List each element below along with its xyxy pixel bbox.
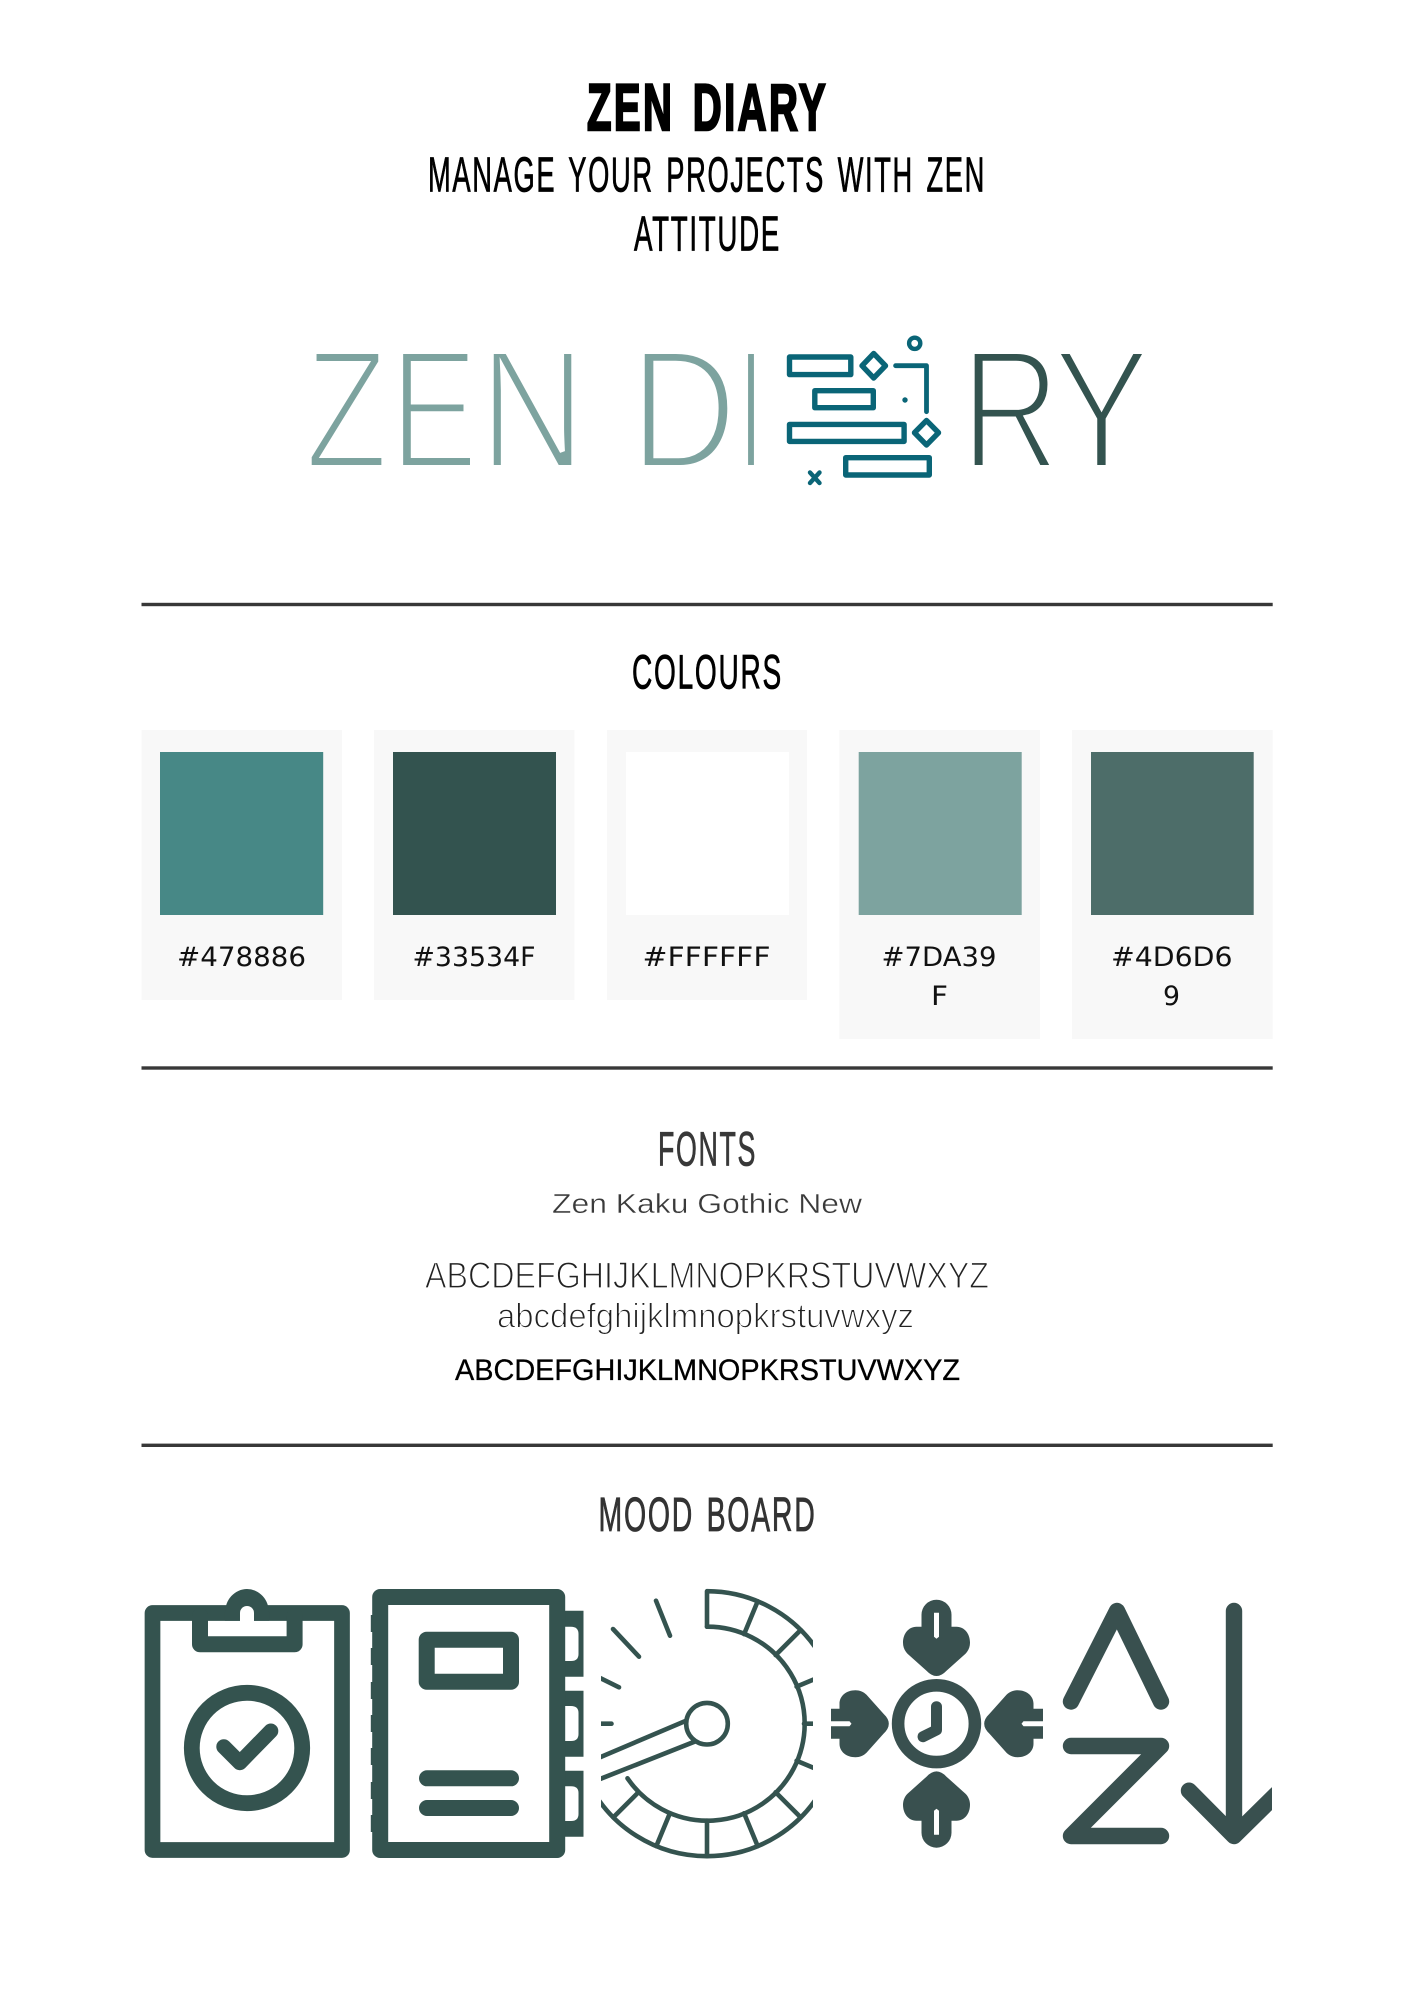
icon: clock with arrows pointing in — [831, 1600, 1043, 1848]
section: mood board — [152, 1488, 1280, 1856]
mood board heading: MOOD BOARD — [598, 1488, 816, 1542]
header — [428, 70, 986, 262]
medium uppercase alphabet: ABCDEFGHIJKLMNOPKRSTUVWXYZ — [455, 1354, 960, 1387]
fonts heading: FONTS — [658, 1122, 757, 1176]
colours heading: COLOURS — [632, 646, 783, 700]
divider — [142, 1066, 1273, 1070]
logo gantt icon — [790, 338, 938, 483]
swatch card 3 — [607, 730, 807, 1000]
font name: Zen Kaku Gothic New — [552, 1188, 863, 1219]
icon: speedometer gauge — [601, 1588, 813, 1858]
logo wordmark: I — [737, 315, 765, 505]
swatch card 4: #7DA39 — [882, 942, 996, 973]
logo wordmark: N — [479, 315, 586, 505]
title: ZEN DIARY — [587, 70, 828, 144]
subtitle line 1: MANAGE YOUR PROJECTS WITH ZEN — [428, 148, 986, 202]
logo wordmark: D — [630, 315, 737, 505]
swatch card 1: #478886 — [177, 942, 306, 973]
icon: A to Z sort — [1071, 1611, 1280, 1836]
divider — [142, 603, 1273, 606]
logo wordmark: Y — [1053, 315, 1150, 505]
logo — [305, 315, 1150, 505]
section: colours — [142, 646, 1273, 1039]
swatch card 1 — [142, 730, 342, 1000]
icon: notebook with tabs — [371, 1597, 598, 1850]
section: fonts — [425, 1122, 989, 1387]
logo wordmark: E — [390, 315, 478, 505]
swatch card 2 — [374, 730, 574, 1000]
icon: clipboard with check — [152, 1589, 342, 1850]
swatch card 5 — [1072, 730, 1273, 1039]
swatch card 4: F — [931, 981, 948, 1012]
light lowercase alphabet: abcdefghijklmnopkrstuvwxyz — [497, 1298, 914, 1336]
swatch card 5: #4D6D6 — [1111, 942, 1232, 973]
light uppercase alphabet: ABCDEFGHIJKLMNOPKRSTUVWXYZ — [425, 1255, 989, 1296]
logo wordmark: Z — [305, 315, 388, 505]
logo wordmark — [305, 315, 1150, 505]
divider — [142, 1444, 1273, 1447]
logo wordmark: R — [961, 315, 1060, 505]
swatch card 2: #33534F — [412, 942, 536, 973]
swatch card 3: #FFFFFF — [642, 942, 770, 973]
swatch card 5: 9 — [1163, 981, 1180, 1012]
swatch card 4 — [839, 730, 1040, 1039]
subtitle line 2: ATTITUDE — [634, 206, 781, 262]
